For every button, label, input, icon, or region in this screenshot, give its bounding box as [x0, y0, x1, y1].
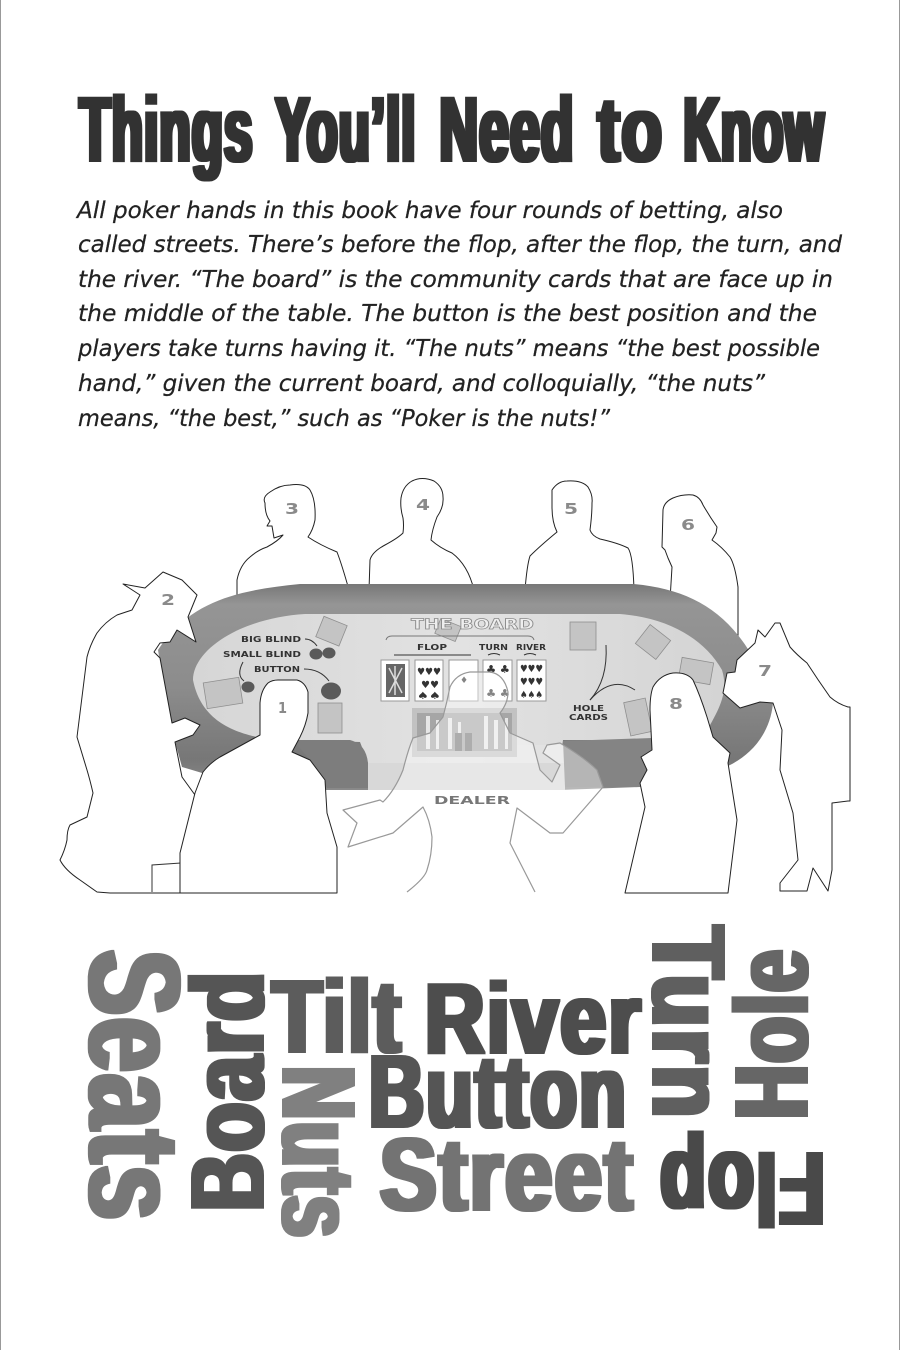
word: Flop: Flop	[658, 1131, 825, 1246]
community cards	[381, 660, 546, 702]
dealer rail section	[368, 763, 565, 790]
seat numbers: 7	[758, 662, 772, 680]
word: Board: Board	[170, 970, 285, 1211]
title: Need	[440, 79, 574, 181]
chair	[152, 863, 181, 892]
dealer label: DEALER	[434, 794, 511, 807]
word: Tilt: Tilt	[272, 959, 403, 1074]
dealer silhouette	[343, 672, 603, 892]
seat numbers: 4	[416, 496, 430, 514]
silhouettes: players behind the table	[237, 478, 738, 640]
intro paragraph	[75, 198, 842, 432]
table labels: BIG BLIND	[241, 635, 301, 644]
table labels	[223, 635, 608, 722]
silhouette: player 1	[180, 680, 337, 893]
word: Nuts: Nuts	[261, 1066, 376, 1239]
chip tray	[412, 708, 517, 757]
seat numbers: 1	[278, 699, 287, 717]
intro paragraph: All poker hands in this book have four rounds of betting, also	[75, 198, 783, 224]
word: Street: Street	[380, 1117, 635, 1232]
seat numbers: 6	[681, 516, 695, 534]
table labels: HOLE	[573, 704, 604, 713]
word: Seats: Seats	[62, 950, 206, 1222]
community cards: ♠♠♠	[520, 690, 543, 701]
word: Button: Button	[369, 1034, 628, 1149]
word cloud	[62, 926, 829, 1246]
word: Turn: Turn	[631, 926, 746, 1120]
seat numbers	[161, 496, 772, 717]
seat numbers: 8	[669, 695, 683, 713]
the board label: THE BOARD	[411, 617, 534, 633]
silhouette: player 7 dog	[723, 623, 850, 891]
seat numbers: 3	[285, 500, 299, 518]
community cards: ♣ ♣	[486, 663, 510, 676]
community cards: ♣ ♣	[486, 687, 510, 700]
table rail	[158, 584, 773, 790]
table labels: BUTTON	[254, 665, 300, 674]
table labels: CARDS	[569, 713, 608, 722]
poker table diagram	[60, 478, 850, 893]
table felt	[193, 614, 724, 763]
table labels: TURN	[479, 643, 508, 652]
table labels: RIVER	[516, 643, 546, 652]
table labels: FLOP	[417, 643, 447, 652]
label brackets and arrows	[240, 636, 635, 700]
seat numbers: 5	[564, 500, 578, 518]
intro paragraph: players take turns having it. “The nuts” means “the best possible	[77, 336, 820, 362]
word: River: River	[425, 963, 643, 1075]
title: to	[598, 79, 664, 181]
bumpers	[293, 740, 368, 788]
title	[80, 79, 824, 181]
intro paragraph: means, “the best,” such as “Poker is the nuts!”	[78, 406, 611, 432]
table labels: SMALL BLIND	[223, 650, 301, 659]
chips and blinds	[242, 648, 341, 700]
intro paragraph: called streets. There’s before the flop, after the flop, the turn, and	[78, 232, 842, 258]
community cards: ♥♥♥	[520, 677, 543, 688]
intro paragraph: hand,” given the current board, and colloquially, “the nuts”	[78, 371, 766, 397]
community cards: ♥♥♥	[417, 667, 441, 678]
community cards: ♥♥	[421, 680, 439, 691]
community cards: ♠♠	[417, 691, 441, 702]
intro paragraph: the middle of the table. The button is the best position and the	[78, 301, 817, 327]
word: Hole: Hole	[714, 948, 829, 1119]
community cards: ♥♥♥	[520, 664, 543, 675]
silhouette: player 2 with hat	[60, 572, 200, 893]
hole cards	[203, 616, 714, 736]
title: Things	[80, 79, 254, 181]
intro paragraph: the river. “The board” is the community cards that are face up in	[78, 267, 833, 293]
title: You’ll	[276, 79, 416, 181]
silhouette: player 8	[625, 673, 737, 893]
community cards: ♦	[460, 676, 468, 686]
seat numbers: 2	[161, 591, 175, 609]
